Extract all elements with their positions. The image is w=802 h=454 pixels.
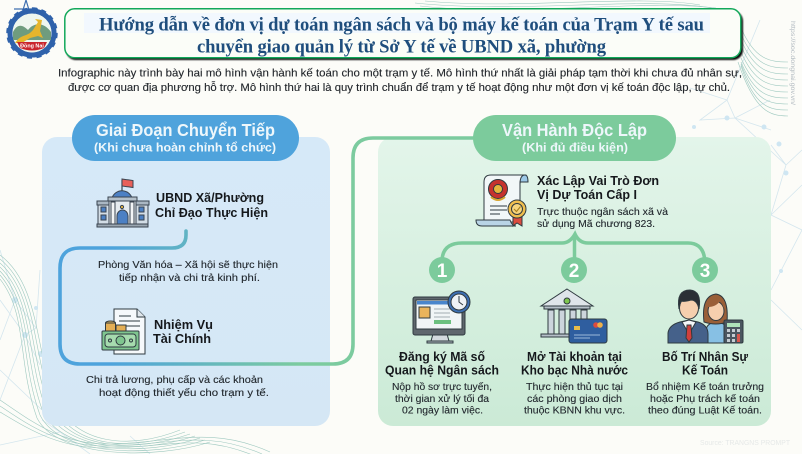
heading: commune people's committee: UBND Xã/Phường: [156, 191, 264, 205]
heading: open treasury account: Mở Tài khoản tại: [527, 350, 622, 364]
heading: register budget code: Quan hệ Ngân sách: [385, 364, 499, 378]
vertical site link: https://soc.dongnai.gov.vn/: [789, 21, 796, 105]
number badge 2: [561, 257, 587, 283]
heading: open treasury account: Kho bạc Nhà nước: [521, 364, 628, 378]
text: financial task details: hoạt động thiết yếu cho trạm y tế.: [99, 387, 269, 399]
text: register budget code details: 02 ngày làm việc.: [402, 404, 483, 416]
arrow: branching connector: [442, 234, 705, 262]
heading: register budget code: Đăng ký Mã số: [399, 350, 485, 364]
text: financial task details: Chi trả lương, phụ cấp và các khoản: [86, 374, 263, 386]
text: open treasury account details: các phòng giao dịch: [527, 393, 622, 405]
icon: treasury bank and card: [541, 289, 607, 343]
icon: certificate: [476, 175, 528, 226]
number badge 3: [692, 257, 718, 283]
logo: Đồng Nai: [8, 0, 56, 57]
text: commune instruction: Phòng Văn hóa – Xã hội sẽ thực hiện: [98, 259, 278, 271]
text: level I budget unit details: Trực thuộc ngân sách xã và: [537, 206, 668, 218]
heading: transition stage pill: Giai Đoạn Chuyển Tiếp: [96, 120, 275, 140]
icon: accountants and calculator: [668, 290, 743, 343]
title box: [65, 9, 743, 60]
title text: chuyển giao quản lý từ Sở Y tế về UBND xã, phường: [197, 36, 607, 58]
heading: arrange accounting staff: Kế Toán: [682, 364, 728, 378]
heading: level I budget unit: Vị Dự Toán Cấp I: [537, 188, 637, 202]
heading: commune people's committee: Chỉ Đạo Thực Hiện: [155, 206, 268, 220]
text: register budget code details: Nộp hồ sơ trực tuyến,: [392, 381, 492, 393]
icon: monitor and clock: [413, 291, 470, 343]
heading: arrange accounting staff: Bố Trí Nhân Sự: [662, 350, 749, 364]
heading: financial task: Tài Chính: [153, 332, 211, 346]
text: arrange accounting staff details: theo đúng Luật Kế toán.: [648, 404, 762, 416]
icon: government building: [97, 179, 149, 227]
heading: independent operation pill: (Khi đủ điều kiện): [522, 140, 628, 154]
text: register budget code details: thời gian xử lý tối đa: [395, 393, 489, 405]
source note: Source: TRANGNS PROMPT: [700, 440, 791, 447]
number badge 3: 3: [700, 261, 710, 282]
number badge 1: 1: [437, 261, 448, 282]
panel: transition stage: [42, 137, 330, 426]
title text: Hướng dẫn về đơn vị dự toán ngân sách và bộ máy kế toán của Trạm Y tế sau: [99, 14, 704, 36]
intro text: Infographic này trình bày hai mô hình vận hành kế toán cho một trạm y tế. Mô hình thứ nhất là giải pháp tạm thời khi chưa đủ nhân sự,: [58, 68, 742, 80]
heading: level I budget unit: Xác Lập Vai Trò Đơn: [537, 174, 659, 188]
logo: Đồng Nai: Đồng Nai: [20, 44, 44, 50]
icon: finance document and money: [102, 309, 145, 354]
text: commune instruction: tiếp nhận và chi trả kinh phí.: [119, 272, 260, 284]
text: arrange accounting staff details: Bổ nhiệm Kế toán trưởng: [646, 381, 764, 393]
number badge 2: 2: [569, 261, 579, 282]
panel: independent operation: [378, 137, 771, 426]
text: arrange accounting staff details: hoặc Phụ trách kế toán: [650, 393, 760, 405]
heading: transition stage pill: [72, 115, 299, 161]
heading: transition stage pill: (Khi chưa hoàn chỉnh tổ chức): [94, 140, 276, 154]
text: open treasury account details: Thực hiện thủ tục tại: [526, 381, 623, 393]
text: open treasury account details: thuộc KBNN khu vực.: [524, 404, 625, 416]
heading: financial task: Nhiệm Vụ: [154, 318, 213, 332]
text: level I budget unit details: sử dụng Mã chương 823.: [537, 218, 655, 230]
number badge 1: [429, 257, 455, 283]
heading: independent operation pill: [473, 115, 676, 161]
intro text: được cơ quan địa phương hỗ trợ. Mô hình thứ hai là quy trình chuẩn để trạm y tế hoạt động như một đơn vị kế toán độc lập, tự chủ.: [68, 81, 730, 94]
heading: independent operation pill: Vận Hành Độc Lập: [502, 120, 647, 140]
arrow: connector between stages: [60, 138, 480, 364]
